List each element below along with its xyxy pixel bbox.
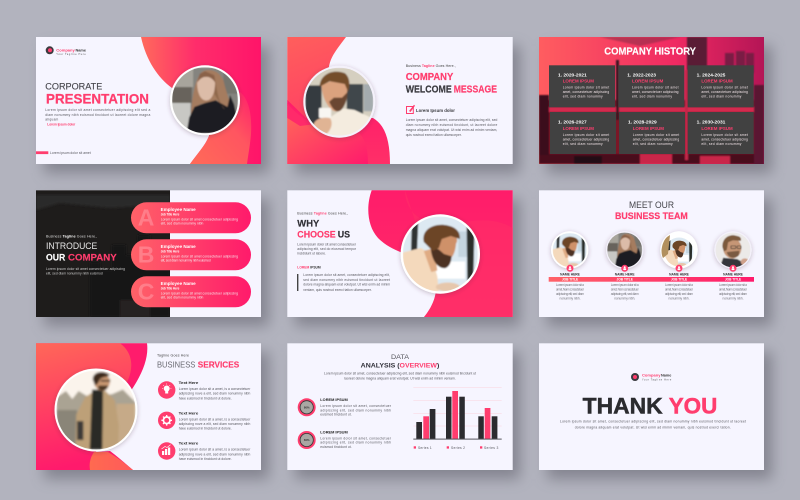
card: 2022-2023: 1. 2022-2023: [627, 72, 657, 77]
title: [45, 81, 149, 106]
panel: corporate presentation slide: [36, 37, 261, 164]
pill: employee B: Lorem ipsum dolor sit amet consectetuer adipiscing: [161, 254, 238, 258]
title: YOU: [669, 393, 717, 418]
card: 2024-2025: elit, sed diam nonummy: [701, 95, 742, 99]
logo: Name: [76, 48, 86, 52]
team member 1: Lorem ipsum dolor sit a: [556, 283, 584, 287]
chart legend: Series 3: [484, 446, 498, 450]
text block: [46, 235, 125, 276]
body text: Lorem ipsum dolor sit amet, consectetuer adipiscing elit, sed: [406, 118, 497, 122]
icon: edit: [406, 105, 415, 114]
heading: MESSAGE: [454, 83, 497, 95]
card: 2030-2031: 1. 2030-2031: [697, 120, 726, 125]
card: 2030-2031: [688, 112, 754, 154]
team member 2: JOB TITLE: [617, 277, 633, 281]
photo: man at window: [401, 214, 480, 294]
intro text: adipiscing elit, sed do eiusmod tempor: [297, 247, 357, 251]
pill: employee A: A: [138, 205, 154, 231]
team member 4: nonummy nibh.: [722, 297, 744, 301]
heading: SERVICES: [198, 359, 240, 369]
pill: employee B: elit, sed diam nonummy nibh euismod: [161, 258, 211, 262]
intro text: Lorem ipsum dolor sit amet, consectetuer adipiscing elit, sed diam nonummy nibh euismod tincidunt ut: [324, 372, 476, 376]
team member 3: Lorem ipsum dolor sit a: [665, 283, 693, 287]
panel: introduce our company slide: [36, 190, 261, 317]
text block: COMPANY: [68, 252, 117, 262]
card: 2024-2025: 1. 2024-2025: [697, 72, 726, 77]
heading: CHOOSE: [297, 229, 336, 240]
body text: [560, 420, 746, 430]
body text: Lorem Ipsum dolor: [47, 122, 76, 126]
heading: WHY: [297, 219, 320, 230]
logo: Company: [56, 48, 76, 52]
pill: employee B: Employee Name: [161, 244, 196, 249]
body text: diam nonummy nibh euismod tincidunt ut laoreet dolore magna: [45, 113, 150, 117]
panel: data analysis slide: [287, 343, 513, 470]
city photo: [539, 37, 764, 165]
card: 2028-2029: elit, sed diam nonummy: [633, 142, 673, 146]
card: 2020-2021: [549, 65, 615, 107]
card: 2022-2023: LOREM IPSUM: [632, 79, 664, 84]
pill: employee B: [131, 239, 251, 270]
subheading: Lorem Ipsum dolor: [416, 108, 455, 113]
card: 2026-2027: LOREM IPSUM: [563, 126, 594, 131]
service: chart: [158, 442, 251, 461]
tagline: Business Tagline Goes Here.,: [297, 212, 348, 216]
lower lighter curve: [190, 92, 251, 164]
quote bar and text: dolore magna aliquam erat volutpat. Ut wisi enim ad minim: [303, 283, 390, 287]
heading: [406, 71, 497, 95]
service: chart: adipiscing nove a elit, sed diam nonummy nibh: [179, 452, 250, 456]
panel: company history slide: [539, 37, 764, 165]
intro text: Lorem ipsum dolor sit amet consectetuer: [297, 242, 357, 246]
service: gear: have euismod in tincidunt ut dolore.: [179, 427, 232, 431]
heading: ANALYSIS (OVERVIEW): [361, 362, 439, 369]
card: 2030-2031: Lorem ipsum dolor sit amet: [701, 133, 748, 137]
team member 3: JOB TITLE: [671, 277, 687, 281]
card: 2020-2021: amet, consectetuer adipiscing: [563, 90, 609, 94]
text block: elit, sed diam nonummy nibh euismod: [46, 272, 103, 276]
team member 2: adipiscing elit, sed diam: [611, 292, 639, 296]
tagline: Business Tagline Goes Here.,: [406, 64, 456, 68]
team member 1: adipiscing elit, sed diam: [556, 292, 584, 296]
pill: employee C: elit, sed diam nonummy nibh: [161, 296, 203, 300]
card: 2028-2029: LOREM IPSUM: [633, 126, 664, 131]
card: 2024-2025: Lorem ipsum dolor sit amet: [701, 86, 748, 90]
heading: MEET OUR: [629, 200, 674, 210]
subheading: LOREM IPSUM: [297, 266, 321, 270]
heading: US: [338, 229, 350, 240]
dark city photo: [36, 190, 170, 317]
team member 4: adipiscing elit, sed diam: [719, 292, 747, 296]
donut 1: [298, 398, 316, 416]
card: 2030-2031: amet, consectetuer adipiscing: [701, 137, 748, 141]
service: gear: Lorem ipsum dolor sit a amet, is a consectetuer: [179, 417, 251, 421]
team member 3: nonummy nibh.: [668, 297, 690, 301]
photo: man with cup: [303, 66, 375, 138]
lorem block 2: LOREM IPSUM: [320, 430, 348, 434]
photo: man in coat: [54, 368, 138, 452]
team member 2: Lorem ipsum dolor sit a: [611, 283, 639, 287]
heading: [157, 354, 240, 369]
team member 3: amet, Nam consectetuer: [665, 288, 694, 292]
quote bar and text: Lorem ipsum dolor sit amet, consectetuer adipiscing elit,: [303, 273, 390, 277]
lorem block 1: LOREM IPSUM: [320, 398, 348, 402]
lorem block 2: euismod tincidunt ut.: [320, 445, 352, 449]
pill: employee C: [131, 276, 251, 307]
team member 1: JOB TITLE: [562, 277, 578, 281]
donut 1: 80%: [304, 406, 310, 410]
title: COMPANY HISTORY: [604, 46, 696, 57]
logo: [631, 373, 672, 381]
donut 2: [298, 431, 316, 449]
card: 2028-2029: amet, consectetuer adipiscing: [633, 137, 679, 141]
bar chart: [413, 388, 502, 440]
team member 1: amet, Nam consectetuer: [556, 288, 585, 292]
text block: OUR: [46, 252, 66, 262]
pill: employee A: Employee Name: [161, 207, 196, 212]
panel: business team slide: [539, 190, 764, 317]
text block: Business Tagline Goes Here.,: [46, 235, 97, 239]
body text: Lorem ipsum dolor sit amet, consectetuer adipiscing elit, sed diam nonummy nibh euismod tincidunt ut laoreet: [560, 420, 746, 424]
service: bulb: Text Here: [179, 381, 198, 385]
pill: employee B: Job Title Here: [161, 250, 179, 254]
bottom salmon lobe: [90, 452, 133, 470]
team member 4: amet, Nam consectetuer: [719, 288, 748, 292]
team member 3: adipiscing elit, sed diam: [665, 292, 693, 296]
lorem block 2: [320, 430, 392, 449]
quote bar and text: veniam, quis nostrud exerci tation ullamcorper.: [303, 288, 372, 292]
team member 1: NAME HERE: [560, 272, 581, 276]
title: THANK: [583, 393, 663, 418]
pink curved shape: [368, 190, 513, 317]
heading: WELCOME: [406, 83, 452, 95]
text block: INTRODUCE: [46, 241, 97, 251]
footer bar: Lorem ipsum dolor sit amet: [50, 151, 91, 155]
lighter overlay lobe: [405, 190, 513, 317]
card: 2022-2023: amet, consectetuer adipiscing: [632, 90, 679, 94]
heading: DATA: [391, 354, 410, 361]
card: 2024-2025: [688, 65, 754, 107]
service: chart: have euismod in tincidunt ut dolore.: [179, 457, 232, 461]
pill: employee A: elit, sed diam nonummy nibh: [161, 222, 203, 226]
service: bulb: Lorem ipsum dolor sit a amet, is a consectetuer: [179, 387, 251, 391]
service: chart: Lorem ipsum dolor sit a amet, is a consectetuer: [179, 448, 251, 452]
service: gear: adipiscing nove a elit, sed diam nonummy nibh: [179, 422, 250, 426]
pill: employee C: Job Title Here: [161, 287, 179, 291]
card: 2028-2029: 1. 2028-2029: [628, 120, 657, 125]
card: 2020-2021: elit, sed diam nonummy: [563, 95, 603, 99]
lorem block 1: adipiscing elit, sed diam nonummy nibh: [320, 408, 391, 412]
service: bulb: have euismod in tincidunt ut dolore.: [179, 396, 232, 400]
donut 2: 60%: [304, 438, 310, 442]
logo: [46, 46, 86, 56]
card: 2030-2031: LOREM IPSUM: [701, 126, 733, 131]
panel: business services slide: [36, 343, 261, 470]
pill: employee A: [131, 202, 251, 233]
heading: [297, 219, 350, 240]
pill: employee A: Lorem ipsum dolor sit amet consectetuer adipiscing: [161, 218, 238, 222]
card: 2020-2021: LOREM IPSUM: [563, 79, 594, 84]
card: 2022-2023: elit, sed diam nonummy: [632, 95, 672, 99]
card: 2028-2029: Lorem ipsum dolor sit amet: [633, 133, 679, 137]
team member 2: NAME HERE: [615, 272, 635, 276]
service: gear: Text Here: [179, 411, 198, 415]
pill: employee C: Lorem ipsum dolor sit amet consectetuer adipiscing: [161, 292, 238, 296]
photo: woman: [170, 65, 240, 135]
card: 2024-2025: amet, consectetuer adipiscing: [701, 90, 748, 94]
pill: employee B: B: [138, 242, 154, 268]
card: 2030-2031: elit, sed diam nonummy: [701, 142, 742, 146]
heading: Tagline Goes Here: [157, 354, 189, 358]
card: 2026-2027: [550, 112, 616, 154]
top salmon curve: [287, 37, 346, 120]
team member 4: NAME HERE: [723, 272, 744, 276]
chart legend: [414, 446, 498, 450]
panel: why choose us slide: [287, 190, 513, 317]
pink lobe: [287, 100, 390, 164]
heading: [615, 200, 688, 221]
intro text: laoreet dolore magna aliquam erat volutpat. Ut wisi enim ad minim veniam.: [344, 376, 456, 380]
pink back shape: [36, 343, 147, 470]
card: 2024-2025: LOREM IPSUM: [701, 79, 733, 84]
team member 1: [551, 231, 588, 301]
pill: employee C: Employee Name: [161, 281, 196, 286]
panel: welcome message slide: [287, 37, 513, 164]
heading: BUSINESS: [157, 359, 196, 369]
card: 2028-2029: [619, 112, 685, 154]
lorem block 1: euismod tincidunt ut.: [320, 413, 352, 417]
card: 2022-2023: Lorem ipsum dolor sit amet: [632, 86, 679, 90]
body text: quis nostrud exerci tation ullamcorper.: [406, 133, 462, 137]
lorem block 1: [320, 398, 392, 417]
slide shadows: [44, 46, 772, 479]
salmon main shape: [36, 343, 131, 470]
card: 2020-2021: Lorem ipsum dolor sit amet: [563, 86, 609, 90]
service: gear: [158, 411, 251, 431]
heading: COMPANY: [406, 71, 453, 83]
panel: thank you slide: [539, 343, 764, 470]
job title bar: [549, 277, 754, 282]
logo: Company: [642, 373, 661, 377]
lorem block 1: Lorem ipsum dolor sit amet, consectetuer: [320, 404, 392, 408]
logo: Name: [661, 373, 671, 377]
team member 4: JOB TITLE: [725, 277, 741, 281]
title: PRESENTATION: [46, 90, 149, 106]
team member 2: [606, 231, 643, 301]
text block: Lorem ipsum dolor sit amet consectetuer adipiscing: [46, 267, 125, 271]
intro text: [324, 372, 476, 380]
team member 3: [660, 231, 698, 301]
intro text: [297, 242, 357, 256]
intro text: incididunt ut labore.: [297, 252, 326, 256]
team member 4: Lorem ipsum dolor sit a: [719, 283, 747, 287]
card: 2026-2027: Lorem ipsum dolor sit amet: [563, 133, 609, 137]
body text: magna aliquam erat volutpat. Ut wisi enim ad minim veniam,: [406, 128, 497, 132]
service: bulb: [158, 381, 251, 400]
title: CORPORATE: [45, 81, 102, 92]
logo: Your Tagline Here: [642, 378, 672, 381]
lorem block 2: Lorem ipsum dolor sit amet, consectetuer: [320, 436, 392, 440]
heading: [361, 354, 439, 369]
logo: Your Tagline Here: [56, 53, 86, 56]
team member 3: NAME HERE: [669, 272, 690, 276]
body text: Lorem ipsum dolor sit amet consectetuer adipiscing elit sed a: [45, 108, 150, 112]
chart legend: Series 2: [451, 446, 465, 450]
card: 2026-2027: 1. 2026-2027: [558, 120, 587, 125]
team member 2: amet, Nam consectetuer: [611, 288, 640, 292]
body text: [45, 108, 150, 126]
heading: BUSINESS TEAM: [615, 211, 688, 221]
pink curved shape: [141, 37, 261, 164]
card: 2026-2027: amet, consectetuer adipiscing: [563, 137, 609, 141]
chart legend: Series 1: [418, 446, 432, 450]
body text: diam nonummy nibh euismod tincidunt, ut laoreet dolore: [406, 123, 497, 127]
title: [583, 393, 717, 418]
card: 2020-2021: 1. 2020-2021: [558, 72, 587, 77]
pill: employee A: Job Title Here: [161, 213, 179, 217]
body text: aliquam: [45, 118, 59, 122]
pill: employee C: C: [138, 279, 154, 305]
team member 1: nonummy nibh.: [560, 297, 581, 301]
card: 2022-2023: [618, 65, 684, 107]
body text: [406, 118, 497, 137]
body text: dolore magna aliquam erat volutpat. Ut wisi enim ad minim veniam, quis nostrud exerci tation.: [575, 426, 731, 430]
service: chart: Text Here: [179, 442, 198, 446]
team member 2: nonummy nibh.: [614, 297, 635, 301]
lower salmon lobe: [287, 107, 368, 164]
quote bar and text: sed diam nonummy nibh euismod tincidunt ut laoreet: [303, 278, 390, 282]
service: bulb: adipiscing nove a elit, sed diam nonummy nibh: [179, 392, 250, 396]
card: 2026-2027: elit, sed diam nonummy: [563, 142, 603, 146]
team member 4: [714, 231, 752, 301]
lorem block 2: adipiscing elit, sed diam nonummy nibh: [320, 441, 391, 445]
quote bar and text: [297, 273, 390, 292]
